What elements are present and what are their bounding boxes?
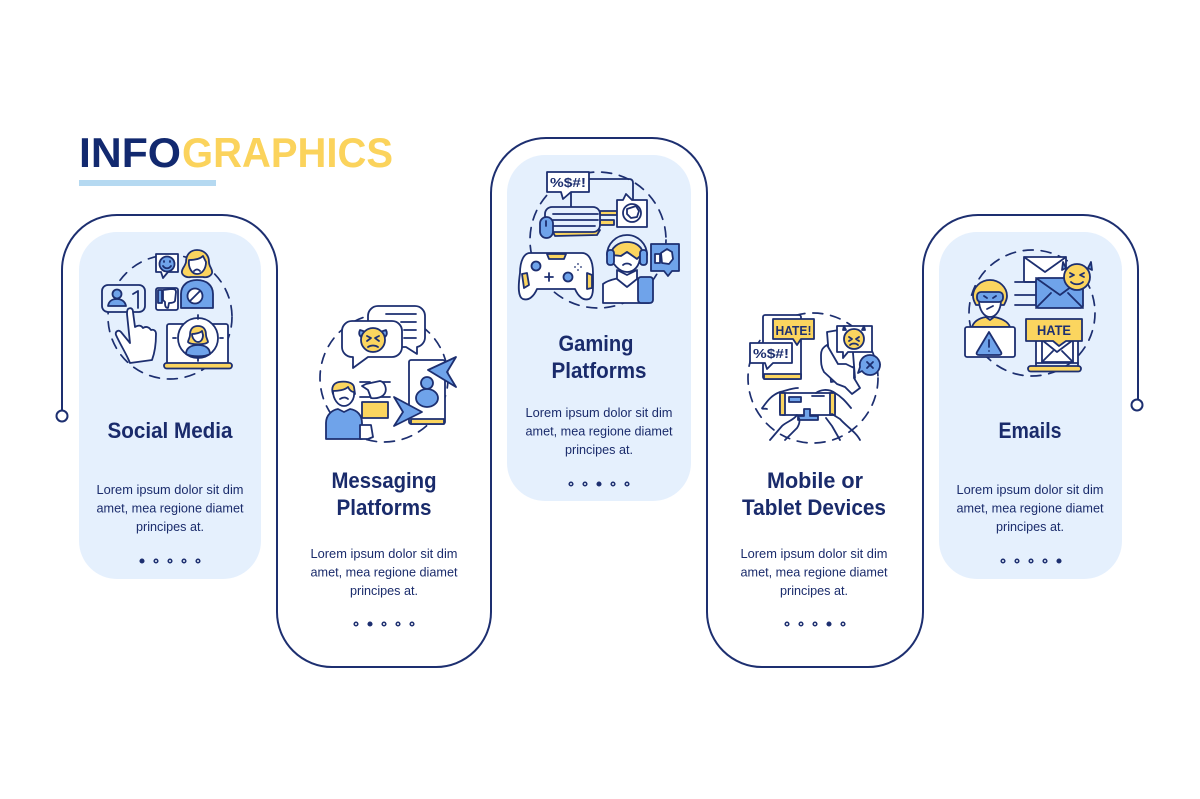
heading — [552, 331, 646, 383]
body text: principes at. — [350, 583, 418, 598]
pagination dots — [1001, 559, 1061, 563]
icon: emails: HATE — [1037, 322, 1071, 338]
body text: Lorem ipsum dolor sit dim — [526, 405, 672, 420]
title: GRAPHICS — [182, 129, 393, 176]
body text: principes at. — [565, 442, 633, 457]
heading: Emails — [998, 418, 1062, 443]
title — [79, 129, 393, 186]
icon: social media — [102, 250, 232, 379]
body text — [526, 405, 673, 457]
heading: Platforms — [552, 358, 646, 383]
icon: mobile: %$#! — [753, 346, 789, 361]
connecting outline — [56, 138, 1142, 667]
pagination dots — [354, 622, 414, 626]
body text: amet, mea regione diamet — [310, 564, 458, 580]
body text — [956, 482, 1104, 534]
heading: Messaging — [332, 468, 436, 493]
heading — [332, 468, 436, 520]
heading: Social Media — [108, 418, 233, 443]
body text: amet, mea regione diamet — [96, 500, 244, 516]
body text: amet, mea regione diamet — [740, 564, 888, 580]
panel: emails — [939, 232, 1122, 579]
icon: mobile: HATE! — [776, 323, 812, 338]
title: INFO — [79, 129, 181, 176]
body text: principes at. — [780, 583, 848, 598]
icon: mobile — [748, 313, 880, 443]
heading: Gaming — [558, 331, 634, 356]
icon: gaming — [519, 172, 679, 308]
panel: social media — [79, 232, 261, 579]
icon: messaging — [320, 306, 456, 442]
pagination dots — [569, 482, 629, 486]
pagination dots — [140, 559, 200, 563]
body text: Lorem ipsum dolor sit dim — [740, 546, 888, 561]
panel: mobile or tablet devices — [740, 313, 888, 626]
heading: Mobile or — [767, 468, 863, 493]
body text — [310, 546, 458, 598]
panel: messaging platforms — [310, 306, 458, 626]
heading: Platforms — [336, 495, 432, 520]
body text: amet, mea regione diamet — [526, 424, 673, 438]
icon: gaming: %$#! — [550, 175, 586, 190]
body text — [96, 482, 244, 534]
heading — [742, 468, 886, 520]
body text: Lorem ipsum dolor sit dim — [310, 546, 458, 561]
heading: Tablet Devices — [742, 495, 886, 520]
body text: Lorem ipsum dolor sit dim — [96, 482, 244, 497]
panel: gaming platforms — [507, 155, 691, 501]
body text: Lorem ipsum dolor sit dim — [956, 482, 1104, 497]
body text: amet, mea regione diamet — [956, 500, 1104, 516]
body text — [740, 546, 888, 598]
pagination dots — [785, 622, 845, 626]
icon: emails — [965, 250, 1095, 376]
body text: principes at. — [136, 519, 204, 534]
body text: principes at. — [996, 519, 1064, 534]
